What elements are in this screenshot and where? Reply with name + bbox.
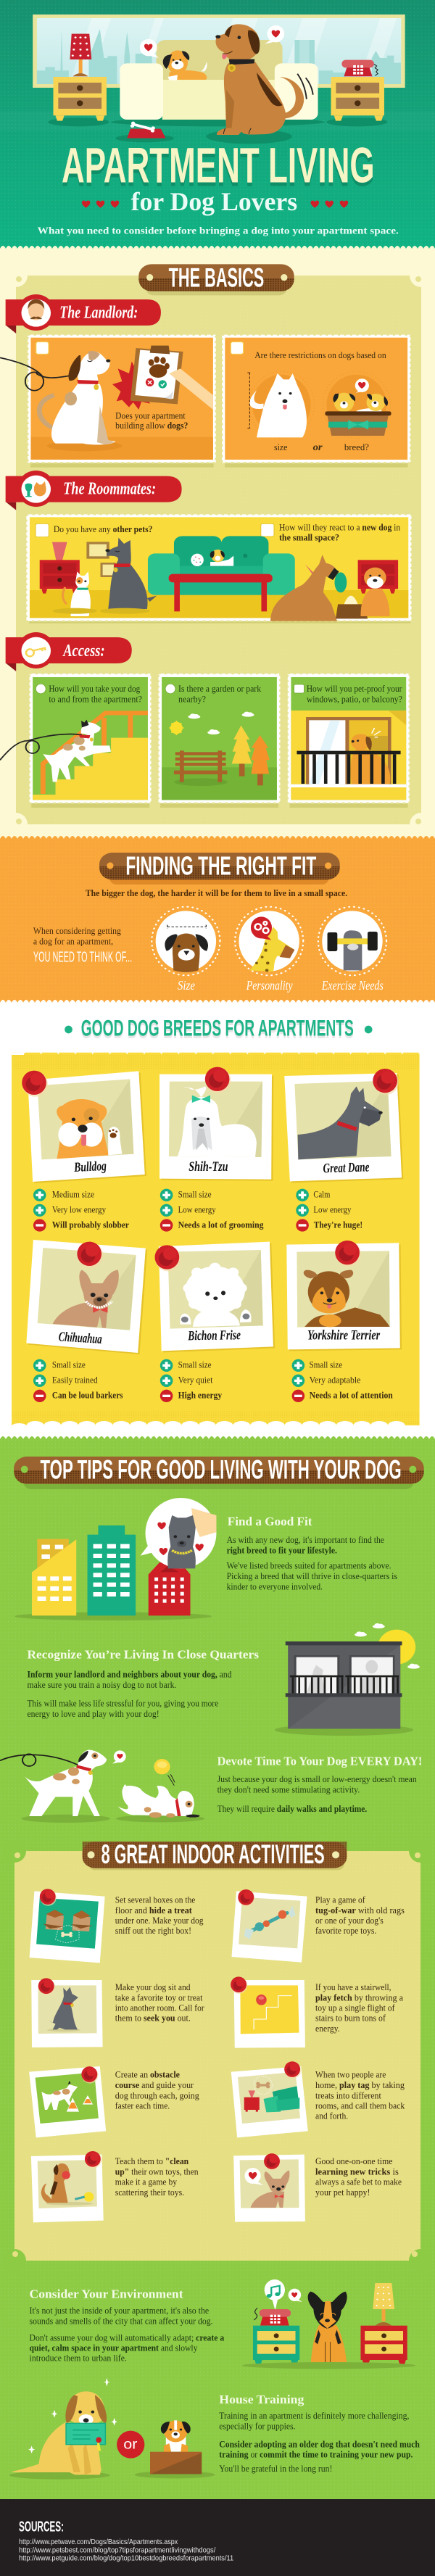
zone 2: landlord and roommates (0, 294, 411, 624)
ribbon: access: Access: (62, 641, 105, 660)
text: new tricks: always a safe bet to make (315, 2177, 402, 2187)
tip: devote time: they don't need some stimulating activity. (218, 1784, 360, 1794)
list: shih-tzu pros (160, 1189, 216, 1217)
tip: consider your environment (30, 2287, 224, 2363)
puppies in a basket (323, 371, 392, 438)
list: great dane pros: Calm (313, 1190, 331, 1199)
card: take your dog to and from (0, 674, 152, 808)
big brown dog (206, 24, 313, 144)
text: clean up (115, 2156, 199, 2198)
polaroid: bichon frise: Bichon Frise (187, 1328, 241, 1343)
zone 3: access (0, 608, 410, 898)
text: how will they react (279, 523, 400, 542)
list: yorkie: Needs a lot of attention (310, 1390, 393, 1400)
list: bulldog pros: Very low energy (52, 1205, 106, 1214)
text: play fetch: If you have a stairwell, (315, 1982, 392, 1992)
tip: find a good fit: As with any new dog, it's important to find the (227, 1535, 384, 1545)
panel: yellow breeds board (12, 1051, 420, 1428)
tip: close quarters: Inform your landlord and neighbors about your dog, and (27, 1669, 232, 1679)
text: sit and seek: them to seek you out. (115, 2013, 191, 2023)
icon: park bench (174, 750, 228, 786)
list: chihuahua: Easily trained (52, 1375, 98, 1385)
zone 8: activities end and environment (30, 2151, 407, 2366)
lying brown dog with muzzle (270, 555, 347, 621)
text: pet proof windows (307, 684, 402, 704)
polaroid: great dane (284, 1069, 403, 1183)
zone 4: finding fit and breeds: YOU NEED TO THINK OF... (33, 949, 132, 965)
tip: consider your environment: Don't assume your dog will automatically adapt; create a (30, 2333, 224, 2343)
icon: personality (235, 907, 303, 975)
labels: size personality exercise needs: Exercise Needs (321, 979, 384, 993)
tip: devote time (218, 1754, 422, 1814)
tip: close quarters: This will make less life stressful for you, giving you more (27, 1699, 218, 1708)
list: bichon: Very quiet (178, 1375, 213, 1385)
labels: size personality exercise needs: Personality (246, 979, 293, 993)
text: do you have other pets: Do you have any other pets? (54, 524, 152, 534)
polaroid: chihuahua: Chihuahua (58, 1330, 103, 1347)
list: chihuahua: Can be loud barkers (52, 1390, 123, 1400)
zone 7: eight indoor activities (29, 1839, 405, 2137)
polaroid: yorkshire terrier: Yorkshire Terrier (307, 1328, 380, 1343)
ribbon: the roommates: The Roommates: (63, 479, 156, 498)
list: great dane pros: Low energy (313, 1205, 352, 1214)
text: is there a garden: nearby? (178, 694, 206, 704)
list: yorkie: Very adaptable (310, 1375, 360, 1385)
text: clean up: make it a game by (115, 2177, 177, 2187)
tip: consider your environment: introduce them to urban life. (30, 2353, 127, 2363)
text: new tricks (315, 2156, 402, 2198)
tip: consider your environment: sounds and smells of the city that can affect your dog. (30, 2316, 212, 2326)
text: how will you take your dog: How will you take your dog (49, 684, 140, 694)
tip: house training (219, 2393, 420, 2474)
list: shih-tzu pros: Low energy (178, 1205, 216, 1214)
tip: house training: House Training (219, 2393, 304, 2406)
white dog on leash (0, 351, 122, 451)
sources: http://www.petguide.com/blog/dog/top10bestdogbreedsforapartments/11 (19, 2555, 233, 2562)
text: size or breed: or (313, 442, 323, 453)
card: roommates living room (26, 514, 411, 624)
heading: 8 great indoor activities (83, 1839, 347, 1870)
list: cons row one (33, 1219, 362, 1232)
sofa (111, 40, 325, 126)
text: boxes: sniff out the right box! (115, 1926, 191, 1936)
tip: find a good fit: right breed to fit your lifestyle. (227, 1545, 337, 1555)
white dog with size ruler (247, 371, 315, 438)
card: does your building allow dogs (0, 335, 216, 468)
labels: size personality exercise needs: Size (178, 979, 195, 993)
ribbon: access (6, 632, 132, 671)
text: when considering: a dog for an apartment, (33, 936, 113, 946)
list: bichon: High energy (178, 1390, 222, 1400)
zone 4: finding fit and breeds (12, 907, 420, 1428)
text: tug of war: or one of your dog's (315, 1916, 384, 1926)
text: clean up: up" their own toys, then (115, 2166, 199, 2177)
text: when considering (33, 926, 132, 965)
text: does your apartment building allow dogs: Does your apartment (115, 410, 186, 421)
tip: find a good fit: kinder to everyone involved. (227, 1581, 323, 1591)
text: new tricks: learning new tricks is (315, 2166, 399, 2177)
text: tug of war (315, 1895, 405, 1936)
icon: clipboard with paw (112, 346, 213, 410)
tip: close quarters: energy to love and play with your dog! (27, 1709, 160, 1719)
list: cons row one: They're huge! (314, 1219, 362, 1230)
icon: right heart bubble (265, 25, 284, 44)
icon: hearts (82, 201, 348, 208)
tip: find a good fit (227, 1515, 397, 1591)
text: when considering: When considering getting (33, 926, 121, 936)
tip: close quarters (27, 1648, 259, 1719)
text: play fetch (315, 1982, 403, 2034)
food bowl (336, 596, 368, 618)
tip: consider your environment: quiet, calm space in your apartment and slowly (30, 2343, 198, 2353)
text: obstacle course: course and guide your (115, 2080, 194, 2090)
list: chihuahua (33, 1359, 123, 1402)
text: size or breed (274, 442, 369, 453)
activity photo: sitting grey dog (31, 1978, 103, 2047)
text: sit and seek: into another room. Call for (115, 2003, 204, 2013)
text: is there a garden: Is there a garden or park (178, 684, 261, 694)
zone 6: tips (0, 1498, 422, 1823)
polaroid: bichon frise (155, 1242, 275, 1352)
icon: red lamp (70, 34, 91, 76)
card: pet-proof (288, 674, 410, 808)
text: play tag: When two people are (315, 2070, 386, 2079)
text: how will you take your dog (49, 684, 142, 704)
window with city skyline (33, 15, 405, 88)
tip: find a good fit: We've listed breeds suited for apartments above. (227, 1561, 392, 1570)
text: how will they react: the small space? (279, 533, 339, 542)
text: pet proof windows: How will you pet-proof your (307, 684, 402, 694)
zone 1: header illustration and title (0, 15, 435, 295)
text: play tag (315, 2070, 405, 2121)
sources: http://www.petsbest.com/blog/top7tipsforapartmentlivingwithdogs/ (19, 2547, 215, 2554)
activity photo: clean up (31, 2151, 104, 2222)
text: how will they react: How will they react to a new dog in (279, 523, 400, 532)
list: bulldog pros (33, 1189, 106, 1217)
text: sit and seek (115, 1982, 204, 2023)
polaroid: bulldog (22, 1071, 146, 1183)
tip: find a good fit: Find a Good Fit (228, 1515, 312, 1528)
list: great dane pros (296, 1189, 352, 1217)
text: play tag: rooms, and call them back (315, 2100, 405, 2111)
walking dog with leash (0, 1749, 126, 1823)
labels: size personality exercise needs (178, 979, 384, 993)
dog with black ears (308, 2292, 347, 2364)
card: garden or park (158, 674, 280, 808)
icon: trees (232, 726, 270, 785)
activity photo: hide a treat (30, 1889, 105, 1963)
section background: dog breeds (0, 1003, 435, 1440)
text: clean up: Teach them to "clean (115, 2156, 189, 2166)
red cabinet with bulldog (358, 560, 398, 616)
section background: header (0, 0, 435, 249)
text: tug of war: tug-of-war with old rags (315, 1905, 405, 1916)
red nightstand with yellow lamp (360, 2283, 407, 2366)
list: bichon: Small size (178, 1360, 212, 1370)
text: obstacle course: dog through each, going (115, 2090, 199, 2100)
sources (19, 2519, 233, 2562)
subtitle: for dog lovers: for Dog Lovers (131, 187, 297, 216)
city buildings (14, 1525, 212, 1620)
white cat (63, 571, 91, 616)
polaroid: great dane: Great Dane (323, 1160, 370, 1176)
text: pet proof windows: windows, patio, or balcony? (307, 694, 402, 704)
text: is there a garden (178, 684, 261, 704)
golden dog with diploma (9, 2378, 117, 2480)
polaroid: shih-tzu (160, 1067, 273, 1181)
red cabinet with vase and frames (40, 542, 116, 594)
text: obstacle course: Create an obstacle (115, 2070, 180, 2079)
text: boxes: under one. Make your dog (115, 1916, 204, 1926)
tip: consider your environment: It's not just the inside of your apartment, it's also the (30, 2306, 209, 2316)
text: does your apartment building allow dogs (115, 410, 188, 431)
activity photo: new tricks (233, 2153, 305, 2222)
heading: the basics: THE BASICS (169, 263, 264, 293)
text: does your apartment building allow dogs: building allow dogs? (115, 421, 188, 431)
balcony with dog (289, 711, 406, 800)
text: boxes: floor and hide a treat (115, 1905, 192, 1916)
teal nightstand with telephone and music bubble (253, 2279, 302, 2366)
section background: sources (0, 2499, 435, 2576)
speech bubble with grey dog (141, 1498, 216, 1568)
tip: close quarters: Recognize You’re Living In Close Quarters (27, 1648, 259, 1661)
text: play tag: home, play tag by taking (315, 2080, 405, 2090)
list: cons row one: Needs a lot of grooming (178, 1219, 264, 1230)
activity photo: play tag (231, 2061, 308, 2137)
list: bulldog pros: Medium size (52, 1190, 94, 1199)
text: boxes: Set several boxes on the (115, 1895, 195, 1905)
list: chihuahua: Small size (52, 1360, 86, 1370)
section background: the basics (0, 249, 435, 840)
text: play tag: treats into different (315, 2090, 381, 2100)
icon: right nightstand with telephone (326, 60, 388, 126)
tip: devote time: They will require daily walks and playtime. (218, 1804, 367, 1814)
text: play fetch: play fetch by throwing a (315, 1992, 403, 2003)
icon: sun and clouds (169, 712, 254, 735)
text: size or breed: size (274, 442, 287, 452)
list: yorkie: Small size (310, 1360, 342, 1370)
icon: exercise needs (318, 907, 386, 975)
text: how will you take your dog: to and from the apartment? (49, 694, 142, 704)
card: restrictions on size or breed: Are there restrictions on dogs based on (254, 350, 386, 360)
icon: left nightstand (48, 77, 109, 126)
list: bichon (160, 1359, 222, 1402)
text: sit and seek: take a favorite toy or treat (115, 1992, 203, 2003)
tip: consider your environment: Consider Your Environment (30, 2287, 183, 2300)
polaroid: yorkshire terrier (286, 1241, 402, 1351)
ribbon: the landlord: The Landlord: (59, 302, 138, 322)
tip: find a good fit: Picking a breed that will thrive in close-quarters is (227, 1571, 397, 1581)
activity photo: obstacle course (29, 2066, 106, 2137)
text: obstacle course (115, 2070, 199, 2111)
text: play fetch: energy. (315, 2024, 340, 2034)
section background: finding the right fit (0, 839, 435, 1003)
rolling dog and ball (116, 1759, 204, 1822)
tagline: What you need to consider before bringing a dog into your apartment space. (38, 225, 399, 236)
small dog on sofa (163, 50, 207, 80)
ribbon: the roommates (6, 471, 182, 510)
grey great dane (105, 538, 157, 609)
sources: SOURCES: (19, 2519, 64, 2535)
text: sit and seek: Make your dog sit and (115, 1982, 191, 1992)
heading: the basics (138, 263, 294, 295)
activity photo: rope toy (232, 1889, 307, 1963)
list: cons row one: Will probably slobber (52, 1219, 129, 1230)
zone 5: breeds continued and top tips heading (12, 1219, 424, 1489)
text: tug of war: favorite rope toys. (315, 1926, 376, 1936)
tip: house training: especially for puppies. (219, 2421, 296, 2431)
card: restrictions on size or breed (222, 335, 410, 468)
panel: the basics board (4, 264, 433, 836)
apartment building balcony (275, 1623, 420, 1736)
list: shih-tzu pros: Small size (178, 1190, 212, 1199)
polaroid: bulldog: Bulldog (73, 1159, 107, 1175)
list: yorkie (292, 1359, 393, 1402)
text: size or breed: breed? (344, 442, 369, 452)
polaroid: chihuahua (26, 1240, 147, 1354)
text: new tricks: Good one-on-one time (315, 2156, 392, 2166)
green sofa (148, 536, 295, 595)
ribbon: the landlord (6, 294, 161, 334)
text: obstacle course: faster each time. (115, 2100, 170, 2111)
zone 9: house training and sources (9, 2362, 420, 2562)
text: the bigger the dog: The bigger the dog, the harder it will be for them to live in a small space. (86, 888, 347, 898)
or badge: or (123, 2437, 137, 2452)
text: boxes (115, 1895, 204, 1936)
icon: size (152, 907, 220, 975)
or badge (117, 2431, 144, 2459)
polaroid: shih-tzu: Shih-Tzu (188, 1159, 228, 1175)
text: play fetch: toy up a single flight of (315, 2003, 395, 2013)
text: play fetch: stairs to burn tons of (315, 2013, 386, 2023)
icon: dog bowl with bone (116, 122, 174, 142)
tip: house training: You'll be grateful in the long run! (219, 2464, 332, 2474)
tip: close quarters: make sure you train a noisy dog to not bark. (27, 1680, 176, 1690)
panel: activities board (3, 1839, 432, 2272)
section background: top tips (0, 1439, 435, 2499)
text: clean up: scattering their toys. (115, 2187, 184, 2198)
text: tug of war: Play a game of (315, 1895, 365, 1905)
puppy in a box (135, 2420, 215, 2478)
text: play tag: and forth. (315, 2111, 348, 2121)
icon: left heart bubble (140, 39, 159, 58)
heading: finding the right fit (99, 852, 340, 885)
activity photo: stairs and ball (231, 1976, 305, 2048)
red coffee table (169, 574, 273, 611)
white dog climbing stairs (0, 720, 111, 782)
sources: http://www.petwave.com/Dogs/Basics/Apartments.aspx (19, 2539, 178, 2546)
text: new tricks: your pet happy! (315, 2187, 370, 2198)
